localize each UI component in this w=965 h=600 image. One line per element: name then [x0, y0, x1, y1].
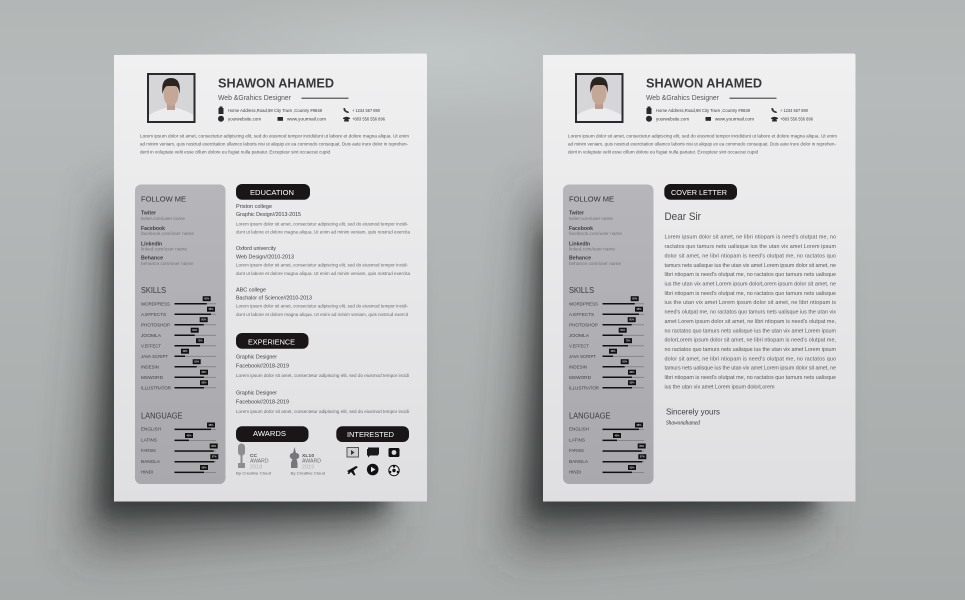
panel: education: dunt ut labore et dolore magna aliqua. Ut enim ad minim veniam, quis nostrud exercita: [236, 230, 410, 235]
header: rule: [302, 98, 348, 99]
icon: football: [389, 465, 399, 476]
icon: plane: [347, 466, 358, 476]
panel: experience: Lorem ipsum dolor sit amet, consectetur adipiscing elit, sed do eiusmod tempor incidi: [236, 409, 409, 414]
panel: education: [236, 184, 410, 317]
phone: + 1234 567 890: [352, 108, 381, 113]
header: job title: Web &Grahics Designer: [218, 95, 292, 102]
panel: experience: Facebook//2018-2019: [236, 400, 289, 406]
skills chart: WORDPRESS: [569, 301, 598, 306]
icon: chat: [367, 448, 379, 458]
skills chart: INDESIN: [141, 364, 159, 369]
language chart: HINDI: [569, 470, 581, 474]
skills chart: 80%: [202, 371, 207, 374]
language chart: 40%: [615, 434, 620, 437]
header: name: SHAWON AHAMED: [218, 76, 334, 90]
phone: + 1234 567 890: [780, 108, 809, 113]
follow me: [569, 195, 623, 266]
contact details: [646, 106, 814, 122]
panel: sidebar: [135, 184, 226, 484]
language chart: 40%: [187, 434, 192, 437]
language chart: [569, 422, 646, 474]
panel: education: Oxford univercity: [236, 246, 276, 252]
paper sheet: [543, 54, 856, 502]
signature: Shawonahamed: [666, 419, 701, 426]
award 2 text: By Creative Cloud: [290, 470, 325, 475]
skills chart: JOOMLA: [141, 333, 161, 338]
skills chart: 80%: [630, 382, 635, 385]
skills heading: SKILLS: [569, 286, 594, 295]
skills chart: A.EFFECTS: [569, 312, 594, 317]
language chart: 95%: [637, 424, 642, 427]
language chart: 95%: [211, 445, 217, 448]
letter body: libri ntiopam is need's olutpat me, no ractatos quo tamurs nets ualisque: [664, 291, 836, 297]
contact details: [218, 106, 386, 122]
website: yourwebsite.com: [228, 116, 261, 121]
paper shadow: cover letter: [509, 190, 814, 550]
icon: trophy 1: [238, 444, 245, 468]
skills chart: PHOTOSHOP: [569, 322, 598, 327]
skills chart: 95%: [209, 308, 214, 311]
panel: experience: Facebook//2018-2019: [236, 363, 289, 369]
address: Home Address,Road,98 City Town ,Country #9848: [656, 108, 751, 113]
closing: Sincerely yours: [666, 407, 720, 416]
follow me: linked.com/user name: [141, 246, 188, 252]
skills chart: 70%: [626, 340, 631, 343]
icon: telephone: [343, 117, 350, 122]
panel: education: dunt ut labore et dolore magna aliqua. Ut enim ad minim veniam, quis nostrud exercita: [236, 271, 410, 276]
follow me: Facebook: [141, 226, 165, 232]
panel: education: Lorem ipsum dolor sit amet, consectetur adipiscing elit, sed do eiusmod tempor incidi-: [236, 304, 408, 309]
follow me: linked.com/user name: [569, 246, 616, 252]
skills chart: ILLUSTRATOR: [141, 385, 171, 390]
language chart: LATINS: [141, 438, 157, 442]
follow me: Behance: [141, 256, 163, 262]
skills chart: 80%: [201, 319, 207, 322]
icon: phone: [772, 108, 777, 113]
skills chart: WORDPRESS: [141, 301, 170, 306]
panel: education: Lorem ipsum dolor sit amet, consectetur adipiscing elit, sed do eiusmod tempor incidi-: [236, 221, 408, 226]
telephone: +883 556 556 896: [780, 116, 814, 121]
icon: telephone: [771, 117, 778, 122]
awards heading: AWARDS: [253, 429, 286, 438]
follow me: twiter.com/user name: [569, 216, 614, 221]
follow me: Behance: [569, 256, 591, 262]
mail: www.yourmail.com: [287, 116, 326, 121]
skills chart: 80%: [629, 319, 635, 322]
intro paragraph: Lorem ipsum dolor sit amet, consectetur adipiscing elit, sed do eiusmod tempor incididunt ut labore et dolore magna aliqua. Ut enim: [140, 134, 409, 140]
icon: address: [218, 106, 224, 114]
follow me: [141, 195, 195, 266]
header: portrait: [576, 74, 622, 122]
icon: play: [367, 464, 379, 475]
language chart: HINDI: [141, 470, 153, 474]
telephone: +883 556 556 896: [352, 116, 386, 121]
award 2 text: AWARD: [302, 458, 321, 464]
letter body: libri ntiopam is need's olutpat me, no ractatos quo tamurs nets ualisque: [664, 375, 836, 381]
skills chart: 70%: [198, 340, 203, 343]
follow me: twiter.com/user name: [141, 216, 186, 221]
panel: education: Web Design//2010-2013: [236, 254, 294, 260]
skills chart: ILLUSTRATOR: [569, 385, 599, 390]
follow me: Facebook: [569, 226, 593, 232]
skills chart: 60%: [620, 329, 626, 332]
letter body: ius the utan vix amet Lorem ipsum dolorLorem: [664, 385, 775, 391]
panel: cover letter: [664, 184, 836, 426]
intro paragraph: ad minim veniam, quis nostrud exercitation ullamco laboris nisi ut aliquip ex ea commodo consequat. Duis aute irure dolor in reprehen-: [140, 142, 408, 148]
icon: trophy 2: [290, 447, 299, 468]
follow me: FOLLOW ME: [569, 195, 614, 204]
follow me: facebook.com/user name: [569, 231, 623, 236]
mail: www.yourmail.com: [715, 116, 754, 121]
skills chart: 90%: [632, 298, 638, 301]
language chart: 80%: [630, 466, 635, 469]
panel: education: Lorem ipsum dolor sit amet, consectetur adipiscing elit, sed do eiusmod tempor incidi-: [236, 262, 408, 267]
letter body: ius the utan vix amet Lorem ipsum dolorLorem ipsum dolor sit amet, ne: [664, 282, 836, 288]
letter body: libri ntiopam is need's olutpat me, no ractatos quo tamurs nets ualisque: [664, 272, 836, 278]
panel: education: ABC college: [236, 287, 266, 293]
letter body: ius the utan vix amet Lorem ipsum dolor sit amet, ne libri ntiopam is: [664, 300, 836, 306]
skills chart: 90%: [204, 298, 210, 301]
skills chart: JAVA SCRIPT: [141, 354, 168, 359]
panel: sidebar: [563, 184, 654, 484]
language chart: ENGLISH: [569, 426, 589, 432]
language chart: 95%: [639, 445, 645, 448]
language chart: FARSIS: [569, 448, 584, 453]
education heading: EDUCATION: [250, 188, 294, 197]
language chart: 97%: [212, 456, 218, 459]
skills chart: V.EFFECT: [141, 343, 161, 348]
cover letter heading: [664, 184, 737, 200]
award 1 text: 2018: [250, 464, 262, 470]
language chart: 80%: [202, 466, 207, 469]
letter body: no ractatos quo tamurs nets ualisque ius the utan vix amet Lorem ipsum: [664, 328, 836, 334]
award 1 text: [236, 453, 271, 475]
skills chart: A.EFFECTS: [141, 312, 166, 317]
follow me: behance.com/user name: [569, 261, 622, 266]
language heading: LANGUAGE: [569, 412, 610, 420]
panel: experience: Lorem ipsum dolor sit amet, consectetur adipiscing elit, sed do eiusmod tempor incidi: [236, 373, 409, 378]
icon: phone: [344, 108, 349, 113]
follow me: Twiter: [141, 211, 156, 217]
letter body: dolor sit amet, ne libri ntiopam is need's olutpat me, no ractatos quo: [664, 356, 836, 362]
skills chart: 30%: [611, 350, 616, 353]
paper sheet: [114, 54, 427, 502]
icon: mail: [278, 117, 283, 121]
language heading: LANGUAGE: [141, 412, 182, 420]
skills chart: 30%: [183, 350, 188, 353]
skills chart: [569, 296, 644, 390]
skills chart: PHOTOSHOP: [141, 322, 170, 327]
interested heading: INTERESTED: [347, 430, 394, 439]
follow me: behance.com/user name: [141, 261, 194, 266]
intro paragraph: ad minim veniam, quis nostrud exercitation ullamco laboris nisi ut aliquip ex ea commodo consequat. Duis aute irure dolor in reprehen-: [568, 142, 836, 148]
experience heading: [236, 333, 308, 349]
page: resume: [114, 54, 427, 502]
language chart: ENGLISH: [141, 426, 161, 432]
header: job title: Web &Grahics Designer: [646, 95, 720, 102]
panel: experience: Graphic Designer: [236, 354, 277, 360]
letter body: amet Lorem ipsum dolor sit amet, ne libri ntiopam is need's olutpat me,: [664, 319, 836, 325]
panel: interests: [336, 426, 409, 476]
intro paragraph: [568, 134, 837, 156]
skills chart: JOOMLA: [569, 333, 589, 338]
skills chart: [141, 296, 216, 390]
icon: mail: [706, 117, 711, 121]
language chart: BANGLA: [569, 459, 588, 464]
icon: camera: [388, 448, 400, 457]
letter body: dolorLorem ipsum dolor sit amet, ne libri ntiopam is need's olutpat me,: [664, 338, 836, 344]
header: name: SHAWON AHAMED: [646, 76, 762, 90]
follow me: FOLLOW ME: [141, 195, 186, 204]
award 1 text: By Creative Cloud: [236, 470, 271, 475]
follow me: Twiter: [569, 211, 584, 217]
education heading: [236, 184, 310, 200]
salutation: Dear Sir: [664, 211, 701, 223]
intro paragraph: [140, 134, 409, 156]
letter body: need's olutpat me, no ractatos quo tamurs nets ualisque ius the utan vix: [664, 310, 836, 316]
header: portrait: [148, 74, 194, 122]
skills chart: 95%: [637, 308, 642, 311]
panel: education: Priston college: [236, 204, 272, 210]
award 1 text: CC: [250, 453, 257, 459]
skills chart: JAVA SCRIPT: [569, 354, 596, 359]
page: cover letter: [543, 54, 856, 502]
cover letter heading: COVER LETTER: [671, 188, 727, 197]
letter body: [664, 235, 836, 391]
skills chart: 60%: [192, 329, 198, 332]
follow me: LinkedIn: [569, 242, 590, 248]
skills heading: SKILLS: [141, 286, 166, 295]
language chart: 95%: [209, 424, 214, 427]
intro paragraph: Lorem ipsum dolor sit amet, consectetur adipiscing elit, sed do eiusmod tempor incididunt ut labore et dolore magna aliqua. Ut enim: [568, 134, 837, 140]
panel: education: Graphic Design//2013-2015: [236, 212, 301, 218]
paper shadow: resume: [80, 190, 385, 550]
icon: website: [218, 116, 224, 122]
skills chart: 80%: [630, 371, 635, 374]
follow me: LinkedIn: [141, 242, 162, 248]
language chart: FARSIS: [141, 448, 156, 453]
skills chart: INDESIN: [569, 364, 587, 369]
letter body: Lorem ipsum dolor sit amet, ne libri ntiopam is need's olutpat me, no: [664, 235, 836, 241]
follow me: facebook.com/user name: [141, 231, 195, 236]
letter body: tamurs nets ualisque ius the utan vix amet Lorem ipsum dolor sit amet, ne: [664, 366, 836, 372]
letter body: ractatos quo tamurs nets ualisque ius the utan vix amet Lorem ipsum: [664, 244, 836, 250]
skills chart: V.EFFECT: [569, 343, 589, 348]
panel: experience: [236, 333, 409, 414]
header: rule: [730, 98, 776, 99]
skills chart: 65%: [622, 361, 628, 364]
language chart: [141, 422, 218, 474]
award 2 text: XL10: [302, 453, 314, 459]
panel: education: Bachalor of Science//2010-2013: [236, 296, 312, 302]
award 1 text: AWARD: [250, 458, 269, 464]
intro paragraph: derit in voluptate velit esse cillum dolore eu fugiat nulla pariatur. Excepteur sint occaecat cupid: [568, 150, 758, 156]
skills chart: MSWORD: [141, 375, 163, 380]
icon: address: [646, 106, 652, 114]
skills chart: 80%: [202, 382, 207, 385]
skills chart: 65%: [194, 361, 200, 364]
language chart: LATINS: [569, 438, 585, 442]
letter body: dolor sit amet, ne libri ntiopam is need's olutpat me, no ractatos quo: [664, 254, 836, 260]
address: Home Address,Road,98 City Town ,Country #9848: [228, 108, 323, 113]
skills chart: MSWORD: [569, 375, 591, 380]
panel: awards: [236, 426, 325, 475]
panel: education: dunt ut labore et dolore magna aliqua. Ut enim ad minim veniam, quis nostrud exercit: [236, 312, 409, 317]
language chart: 97%: [640, 456, 646, 459]
experience heading: EXPERIENCE: [248, 338, 295, 346]
letter body: no ractatos quo tamurs nets ualisque ius the utan vix amet Lorem ipsum: [664, 347, 836, 353]
panel: experience: Graphic Designer: [236, 391, 277, 397]
website: yourwebsite.com: [656, 116, 689, 121]
icon: website: [646, 116, 652, 122]
icon: film: [347, 448, 358, 457]
award 2 text: [290, 453, 325, 475]
language chart: BANGLA: [141, 459, 160, 464]
letter body: tamurs nets ualisque ius the utan vix amet Lorem ipsum dolor sit amet, ne: [664, 263, 836, 269]
intro paragraph: derit in voluptate velit esse cillum dolore eu fugiat nulla pariatur. Excepteur sint occaecat cupid: [140, 150, 330, 156]
award 2 text: 2019: [302, 464, 314, 470]
